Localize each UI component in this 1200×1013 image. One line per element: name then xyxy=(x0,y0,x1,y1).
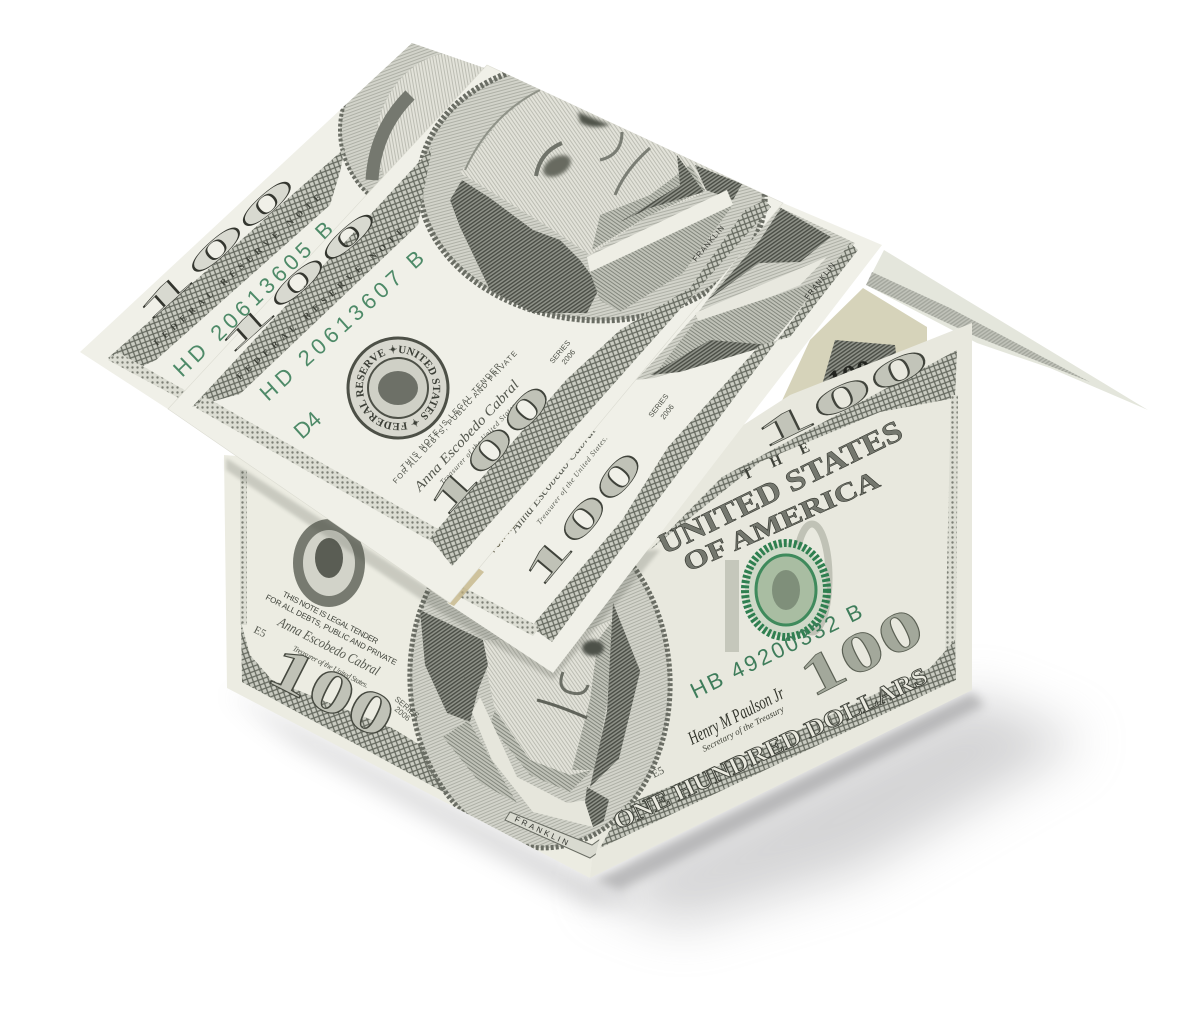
watermark hundred xyxy=(725,524,829,652)
right ornament band xyxy=(430,200,771,566)
brow and eye far xyxy=(578,112,610,127)
hair xyxy=(450,180,600,313)
nose xyxy=(561,672,588,694)
green treasury seal xyxy=(745,543,827,637)
bottom ribbon xyxy=(504,811,600,859)
hair left xyxy=(420,610,488,722)
coat xyxy=(590,205,733,312)
text: the united states of america: THE xyxy=(740,440,812,484)
text: series 2006: SERIES xyxy=(393,695,421,720)
cheek shading xyxy=(592,165,705,250)
text: the united states of america: UNITED STATES xyxy=(653,414,908,561)
collar xyxy=(587,190,733,272)
neck shadow xyxy=(620,155,704,222)
text: franklin: FRANKLIN xyxy=(802,260,837,301)
hair right xyxy=(590,603,645,787)
text: legal tender: FOR ALL DEBTS, PUBLIC AND PRIVATE xyxy=(488,399,613,554)
bottom fringe xyxy=(108,352,185,398)
mouth xyxy=(537,700,587,718)
text: series year: 2006 xyxy=(560,348,577,366)
text: upper hundreds: 100 xyxy=(130,170,303,330)
fold gap line xyxy=(448,568,484,606)
coat hatch left xyxy=(443,720,517,803)
text: one hundred dollars: ONE HUNDRED DOLLARS xyxy=(609,663,932,835)
interior bill fragment xyxy=(822,340,897,399)
text: series year: 2006 xyxy=(393,705,413,723)
text: signature: Anna Escobedo Cabral xyxy=(411,378,523,496)
face xyxy=(460,88,740,255)
brow near xyxy=(536,143,562,176)
text: the united states of america: OF AMERICA xyxy=(679,465,884,577)
face xyxy=(483,620,612,777)
bottom ornament band xyxy=(600,640,956,848)
text: series year: 2006 xyxy=(658,403,676,421)
bottom fringe xyxy=(458,587,540,636)
roof shadow on walls xyxy=(226,458,660,680)
text: secretary of the treasury: Secretary of the Treasury xyxy=(700,704,786,754)
coat xyxy=(654,280,822,375)
text: large 100: 100 xyxy=(790,595,934,710)
federal reserve seal xyxy=(293,519,365,607)
ornament band xyxy=(192,148,432,407)
portrait oval xyxy=(418,72,768,324)
hair xyxy=(708,208,831,300)
ornament band xyxy=(108,148,345,372)
text: franklin: FRANKLIN xyxy=(513,815,570,847)
forehead line xyxy=(465,90,540,170)
left wall bill xyxy=(224,455,679,878)
jaw shading xyxy=(490,710,592,792)
text: signature: Anna Escobedo Cabral xyxy=(507,424,599,536)
bottom fringe xyxy=(196,396,440,542)
third roof bill xyxy=(447,203,882,673)
left fringe xyxy=(240,470,247,625)
back roof flap xyxy=(866,250,1148,410)
text: federal reserve note: FEDERAL RESERVE NOTE xyxy=(152,192,323,347)
right fringe xyxy=(945,395,958,655)
text: left wall 100: 100 xyxy=(258,633,406,752)
coat right xyxy=(585,787,609,827)
text: legal tender notice: THIS NOTE IS LEGAL TENDER xyxy=(281,590,380,646)
text: series mark: E5 xyxy=(650,764,667,781)
portrait oval xyxy=(338,43,484,195)
rear roof bill xyxy=(80,43,484,409)
upper ornament band xyxy=(650,350,957,550)
text: serial number: HD 20613605 B xyxy=(168,216,338,382)
text: serial number: HB 49200332 B xyxy=(686,599,866,703)
portrait region xyxy=(636,205,855,380)
federal reserve seal xyxy=(346,336,450,440)
text: series mark left: E5 xyxy=(252,624,268,640)
text: series: SERIES xyxy=(646,392,671,419)
interior bill fragment: 100 xyxy=(824,353,877,399)
collar xyxy=(472,697,593,827)
ground shadow xyxy=(227,690,1085,925)
text: series: SERIES xyxy=(548,338,572,365)
hair right xyxy=(695,165,742,200)
eye near xyxy=(540,151,574,181)
portrait oval xyxy=(407,566,656,859)
text: legal tender: THIS NOTE IS LEGAL TENDER xyxy=(399,361,503,471)
text: letter code: D4 xyxy=(289,406,326,444)
ornament band xyxy=(531,243,858,642)
text: treasurer title: Treasurer of the United States. xyxy=(438,400,520,486)
text: treasurer signature: Anna Escobedo Cabral xyxy=(274,615,382,679)
text: upper hundreds: 100 xyxy=(212,203,385,363)
text: treasurer title: Treasurer of the United States. xyxy=(534,434,609,526)
portrait oval right side on wall xyxy=(594,566,673,837)
illustration: house built from hundred dollar bills xyxy=(80,43,1147,940)
text: serial number: HD 20613607 B xyxy=(255,245,429,406)
interior of house seen through gap xyxy=(780,288,927,405)
text: legal tender notice: FOR ALL DEBTS, PUBLIC AND PRIVATE xyxy=(264,593,398,667)
text: franklin: FRANKLIN xyxy=(691,223,727,263)
text: treasurer title: Treasurer of the United States. xyxy=(291,644,370,690)
collar xyxy=(695,257,827,325)
text: legal tender: FOR ALL DEBTS, PUBLIC AND PRIVATE xyxy=(391,349,519,485)
text: top hundred ovals: 100 xyxy=(748,338,936,457)
front roof bill xyxy=(168,64,784,604)
eye xyxy=(582,640,604,656)
nose and mouth xyxy=(600,132,650,195)
text: second 100: 100 xyxy=(515,442,653,596)
text: federal reserve note: FEDERAL RESERVE NOTE xyxy=(235,226,406,381)
right wall bill xyxy=(590,323,972,877)
text: big 100: 100 xyxy=(419,375,561,526)
text: secretary signature: Henry M Paulson Jr xyxy=(684,683,788,750)
bottom ornament band xyxy=(241,622,445,792)
